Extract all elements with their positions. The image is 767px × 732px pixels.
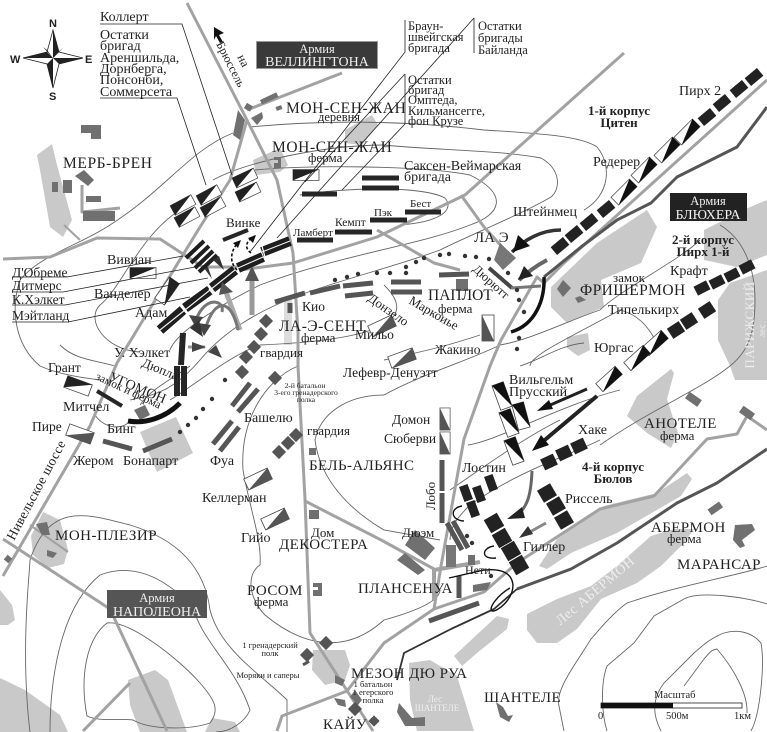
dashed British arrows xyxy=(232,236,255,270)
commander labels centre: Мильо xyxy=(355,327,394,342)
commander labels north: Пэк xyxy=(374,207,393,219)
place names: ферма xyxy=(254,594,289,609)
army label Wellington xyxy=(256,42,378,70)
commander labels north: Винке xyxy=(226,215,261,230)
commander labels centre: Дюэм xyxy=(402,525,434,540)
commander labels east: Штейнмец xyxy=(513,205,578,220)
place names: МАРАНСАР xyxy=(677,557,761,573)
scale bar: Масштаб xyxy=(654,690,695,701)
road labels xyxy=(3,39,253,542)
corps labels: 2-й корпус xyxy=(672,232,734,247)
commander labels east: Пирх 2 xyxy=(679,84,721,99)
commander labels centre: Домон xyxy=(392,412,430,427)
place names: замок и ферма xyxy=(94,371,163,412)
commander labels east: Вильгельм xyxy=(509,373,573,388)
curved Prussian loop arrows xyxy=(449,506,513,611)
corps labels: Бюлов xyxy=(594,471,632,486)
commander labels north: бригада xyxy=(404,170,452,185)
commander labels centre: Кио xyxy=(302,299,325,314)
commander labels north: Омптеда, xyxy=(408,93,458,107)
commander labels west: Фуа xyxy=(210,454,235,469)
scale bar: 0 xyxy=(598,711,603,722)
commander labels north: бригад xyxy=(100,39,141,54)
French guard squares xyxy=(235,314,380,727)
cavalry flags French xyxy=(66,315,494,530)
place names: деревня xyxy=(318,110,360,124)
army label Napoleon: Армия xyxy=(139,591,175,605)
commander labels north: Остатки xyxy=(100,28,149,43)
scale bar: 500м xyxy=(666,711,689,722)
army label Napoleon: НАПОЛЕОНА xyxy=(113,605,202,620)
army label Blucher xyxy=(670,193,747,223)
forest labels: ПАРИЖСКИЙ xyxy=(742,281,757,369)
small unit notes: 1 егерского xyxy=(353,687,393,697)
road labels: на xyxy=(234,52,253,70)
corps labels: Пирх 1-й xyxy=(677,244,730,259)
commander labels west: Грант xyxy=(48,360,81,375)
commander labels east: Юргас xyxy=(594,341,634,356)
dashed arrow heads xyxy=(233,235,256,248)
road labels: Нивельское шоссе xyxy=(3,438,69,542)
commander labels north: Дорнберга, xyxy=(100,62,167,77)
commander labels centre: Нети xyxy=(465,563,491,577)
corps labels: 4-й корпус xyxy=(582,459,644,474)
commander labels west: Вивиан xyxy=(107,253,152,268)
commander labels east: Прусский xyxy=(509,385,568,400)
army label Blucher: Армия xyxy=(690,194,726,208)
commander labels east xyxy=(462,84,721,555)
commander labels north: швейгская xyxy=(408,30,464,44)
commander labels west: Адам xyxy=(135,306,167,321)
commander labels north: Бест xyxy=(410,198,431,210)
commander labels north: бригады xyxy=(478,31,523,45)
leader lines xyxy=(12,18,474,322)
army label Wellington: Армия xyxy=(299,42,335,56)
British infantry line xyxy=(160,241,290,330)
commander labels east: Риссель xyxy=(565,492,612,507)
place names: МОН-СЕН-ЖАН xyxy=(286,100,406,117)
commander labels centre: Лобо xyxy=(423,482,438,510)
commander labels north: Остатки xyxy=(408,73,452,87)
compass rose: N xyxy=(49,18,57,30)
compass rose: E xyxy=(85,54,92,66)
army label Napoleon xyxy=(107,590,207,620)
place names: ПЛАНСЕНУА xyxy=(358,581,453,597)
road labels: Брюссель xyxy=(213,39,248,90)
commander labels north: Кильмансегге, xyxy=(408,104,485,118)
commander labels north: Браун- xyxy=(408,19,443,33)
Brussels direction arrow xyxy=(214,27,224,43)
commander labels north: Ареншильда, xyxy=(100,51,179,66)
commander labels east: Крафт xyxy=(670,264,708,279)
commander labels north: Коллерт xyxy=(100,10,149,25)
commander labels east: Лостин xyxy=(462,461,506,476)
commander labels west: Жером xyxy=(73,454,114,469)
commander labels east: Хаке xyxy=(578,423,607,438)
place names: МОН-СЕН-ЖАН xyxy=(272,139,392,156)
commander labels west: Башелю xyxy=(244,411,293,426)
place names: ферма xyxy=(667,531,702,546)
forest labels: ШАНТЕЛЕ xyxy=(415,703,460,713)
place names xyxy=(55,100,761,732)
river xyxy=(397,107,767,680)
place names: АБЕРМОН xyxy=(651,520,726,536)
commander labels east: Гиллер xyxy=(523,540,565,555)
place names: ферма xyxy=(308,150,343,165)
place names: ЛА Э xyxy=(474,230,509,246)
army label Blucher: БЛЮХЕРА xyxy=(675,208,741,223)
forest labels: лес xyxy=(757,325,767,337)
commander labels centre: Донзело xyxy=(365,290,412,329)
place names: Дом xyxy=(311,525,334,540)
commander labels west: Ванделер xyxy=(94,287,151,302)
corps labels: 1-й корпус xyxy=(588,103,650,118)
commander labels north: Соммерсета xyxy=(100,85,173,100)
commander labels west: Келлерман xyxy=(202,491,267,506)
small unit notes: 3-его гренадерского xyxy=(274,388,338,397)
place names: ферма xyxy=(660,428,695,443)
commander labels centre: Дюрютт xyxy=(470,262,513,302)
scale bar xyxy=(598,690,751,722)
place names: ЛА-Э-СЕНТ xyxy=(279,318,366,335)
place names: МОН-ПЛЕЗИР xyxy=(55,528,157,544)
commander labels west: гвардия xyxy=(260,345,303,360)
commander labels north: Понсонби, xyxy=(100,73,163,88)
commander labels north: Остатки xyxy=(478,19,522,33)
place names: замок xyxy=(613,270,646,285)
small unit notes: 1 гренадерский xyxy=(242,640,298,650)
place names: МЕЗОН ДЮ РУА xyxy=(351,666,467,682)
small unit notes: 2-й батальон xyxy=(285,381,325,390)
cavalry flags Prussian xyxy=(492,119,700,465)
place names: ШАНТЕЛЕ xyxy=(484,690,561,706)
commander labels west: Мэйтланд xyxy=(12,308,70,323)
commander labels west: Дитмерс xyxy=(12,278,62,293)
compass rose: W xyxy=(10,54,21,66)
commander labels west: гвардия xyxy=(307,423,350,438)
compass rose xyxy=(10,18,92,103)
commander labels north: Кемпт xyxy=(335,217,366,229)
place names: ДЕКОСТЕРА xyxy=(279,537,368,553)
cavalry flags allied xyxy=(64,168,319,396)
commander labels west: Бинг xyxy=(107,422,136,437)
place names: ферма xyxy=(301,330,336,345)
commander labels north: Байланда xyxy=(478,43,528,57)
commander labels north: бригада xyxy=(408,41,450,55)
small unit notes: Моряки и саперы xyxy=(236,670,300,680)
commander labels west: Гийо xyxy=(241,531,271,546)
commander labels east: Типелькирх xyxy=(608,303,679,318)
commander labels centre xyxy=(302,262,513,577)
commander labels north: Саксен-Веймарская xyxy=(404,159,522,174)
forest labels xyxy=(415,281,767,713)
commander labels north: Ламберт xyxy=(293,227,333,239)
small unit notes: полка xyxy=(363,695,384,705)
commander labels west: Д'Обреме xyxy=(12,265,68,280)
small unit notes: 1 батальон xyxy=(354,679,393,689)
forest labels: Лес xyxy=(428,694,442,704)
commander labels centre: Лефевр-Денуэтт xyxy=(343,365,438,380)
commander labels west: Пире xyxy=(32,419,62,434)
commander labels west: Дюпла xyxy=(140,355,181,383)
place names: МЕРБ-БРЕН xyxy=(63,155,153,172)
French bars xyxy=(103,268,541,621)
place names: АНОТЕЛЕ xyxy=(644,416,717,432)
place names: ферма xyxy=(438,301,473,316)
corps labels xyxy=(582,103,734,486)
commander labels centre: Жакино xyxy=(435,342,481,357)
commander labels centre: Сюберви xyxy=(384,431,436,446)
scale bar: 1км xyxy=(734,711,751,722)
small unit notes xyxy=(236,381,393,705)
small unit notes: полк xyxy=(261,648,279,658)
skirmisher dots xyxy=(178,252,526,578)
allied and Prussian bars xyxy=(97,178,441,422)
commander labels north: фон Крузе xyxy=(408,114,464,128)
commander labels west xyxy=(12,253,350,546)
commander labels north: бригад xyxy=(408,83,445,97)
French attack arrows xyxy=(188,256,259,358)
place names: БЕЛЬ-АЛЬЯНС xyxy=(309,458,414,474)
commander labels west: У. Хэлкет xyxy=(114,346,170,361)
place names: ПАПЛОТ xyxy=(428,287,493,304)
place names: ФРИШЕРМОН xyxy=(580,282,686,299)
commander labels west: Бонапарт xyxy=(123,454,178,469)
forest labels: Лес АБЕРМОН xyxy=(553,554,638,629)
commander labels centre: Маркоиье xyxy=(406,293,462,333)
small unit notes: полка xyxy=(297,395,316,404)
army label Wellington: ВЕЛЛИНГТОНА xyxy=(265,55,370,70)
Prussian infantry blocks xyxy=(459,68,763,575)
Vivian infantry block xyxy=(186,241,217,272)
place names: РОСОМ xyxy=(247,583,303,599)
place names: УГОМОН xyxy=(106,370,168,407)
compass rose: S xyxy=(49,91,56,103)
commander labels west: К.Хэлкет xyxy=(12,292,65,307)
commander labels west: Митчел xyxy=(63,400,109,415)
commander labels north xyxy=(100,10,528,239)
Prussian arrows xyxy=(507,230,597,538)
commander labels east: Редерер xyxy=(593,155,640,170)
corps labels: Цитен xyxy=(600,115,638,130)
